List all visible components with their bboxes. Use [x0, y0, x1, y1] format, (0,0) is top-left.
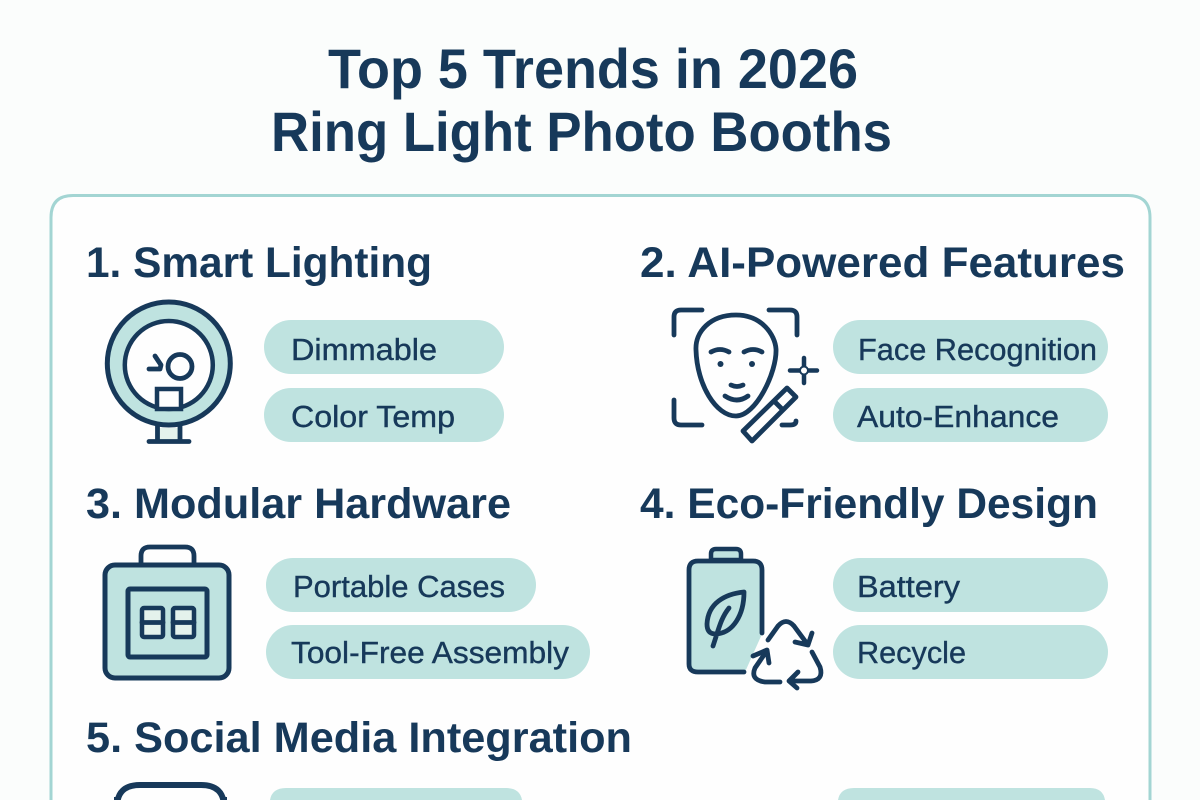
icon: modular case — [105, 547, 229, 678]
pill: recycle — [833, 625, 1108, 679]
section: smart lighting — [86, 239, 504, 442]
section: eco-friendly design — [640, 480, 1108, 688]
pill: face recognition — [833, 320, 1108, 374]
title — [271, 37, 892, 163]
pill: portable cases: Portable Cases — [293, 569, 505, 604]
section: social media integration — [86, 714, 1105, 800]
pill: tool-free assembly — [266, 625, 590, 679]
heading: social media integration: 5. Social Media Integration — [86, 714, 632, 762]
pill: face recognition: Face Recognition — [858, 332, 1097, 367]
pill: auto-enhance — [833, 388, 1108, 442]
heading: smart lighting: 1. Smart Lighting — [86, 239, 432, 287]
icon: ring light — [107, 302, 230, 442]
title: Top 5 Trends in 2026 — [328, 37, 858, 100]
pill: dimmable — [264, 320, 504, 374]
pill: tool-free assembly: Tool-Free Assembly — [291, 635, 569, 670]
pill: social right — [838, 788, 1105, 800]
pill: social left — [270, 788, 522, 800]
icon: battery with leaf and recycle arrows — [689, 549, 821, 688]
pill: portable cases — [266, 558, 536, 612]
heading: modular hardware: 3. Modular Hardware — [86, 480, 511, 528]
pill: recycle: Recycle — [857, 635, 966, 670]
pill: dimmable: Dimmable — [291, 332, 437, 367]
panel: trends container — [51, 196, 1150, 800]
pill: color temp: Color Temp — [291, 399, 455, 434]
heading: ai-powered features: 2. AI-Powered Features — [640, 239, 1125, 287]
icon: face recognition with wand — [674, 310, 817, 441]
title: Ring Light Photo Booths — [271, 100, 892, 163]
heading: eco-friendly design: 4. Eco-Friendly Design — [640, 480, 1098, 528]
pill: battery — [833, 558, 1108, 612]
pill: auto-enhance: Auto-Enhance — [857, 399, 1059, 434]
pill: color temp — [264, 388, 504, 442]
icon: social media frame — [117, 785, 224, 800]
section: modular hardware — [86, 480, 590, 679]
section: ai-powered features — [640, 239, 1125, 442]
pill: battery: Battery — [857, 569, 961, 604]
